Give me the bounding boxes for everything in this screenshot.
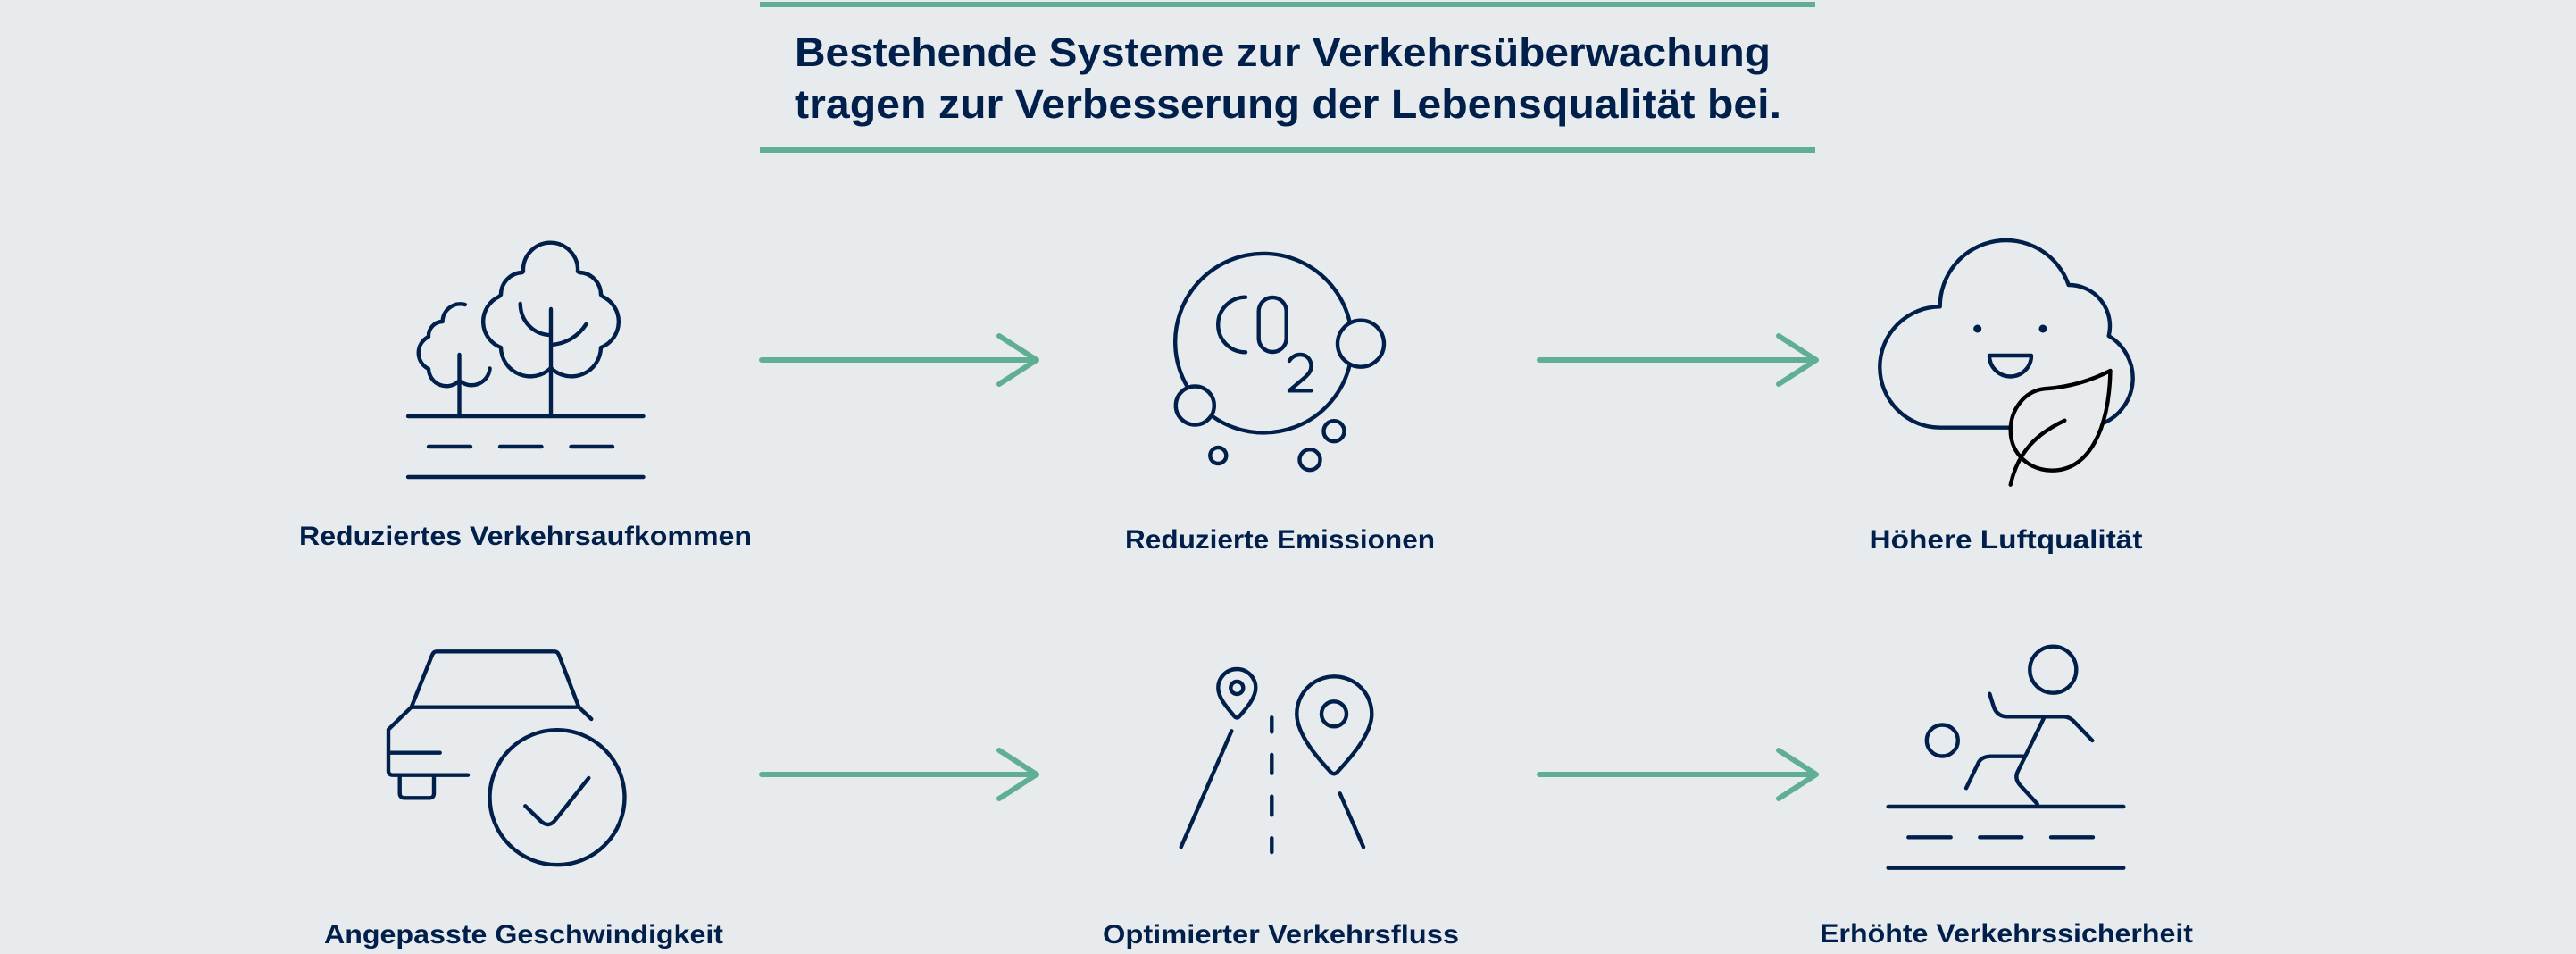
label: Reduziertes Verkehrsaufkommen bbox=[299, 522, 752, 551]
arrow: flow to safety bbox=[1539, 750, 1816, 799]
panel: Erhöhte Verkehrssicherheit bbox=[1820, 647, 2193, 949]
panel: Angepasste Geschwindigkeit bbox=[324, 651, 723, 950]
icon: smiling cloud with leaf bbox=[1880, 240, 2133, 485]
panel: Optimierter Verkehrsfluss bbox=[1103, 669, 1459, 950]
label: Optimierter Verkehrsfluss bbox=[1103, 920, 1459, 950]
arrow: speed to flow bbox=[762, 750, 1037, 799]
arrow: emissions to air quality bbox=[1539, 336, 1816, 384]
panel: Reduziertes Verkehrsaufkommen bbox=[299, 243, 752, 551]
icon: trees and road bbox=[408, 243, 643, 477]
panel: Reduzierte Emissionen bbox=[1125, 254, 1435, 555]
title block bbox=[760, 2, 1815, 153]
title text: Bestehende Systeme zur Verkehrsüberwachung bbox=[795, 29, 1771, 75]
panel: Höhere Luftqualität bbox=[1870, 240, 2143, 555]
icon: CO2 bubbles bbox=[1175, 254, 1384, 470]
title text: tragen zur Verbesserung der Lebensqualität bei. bbox=[795, 81, 1781, 127]
icon: car with check mark bbox=[388, 651, 625, 865]
icon: road with location pins bbox=[1181, 669, 1371, 852]
icon: child running after ball on road bbox=[1888, 647, 2123, 868]
arrow: traffic to emissions bbox=[762, 336, 1037, 384]
label: Erhöhte Verkehrssicherheit bbox=[1820, 919, 2193, 949]
label: Höhere Luftqualität bbox=[1870, 525, 2143, 555]
label: Reduzierte Emissionen bbox=[1125, 525, 1435, 555]
label: Angepasste Geschwindigkeit bbox=[324, 920, 723, 950]
